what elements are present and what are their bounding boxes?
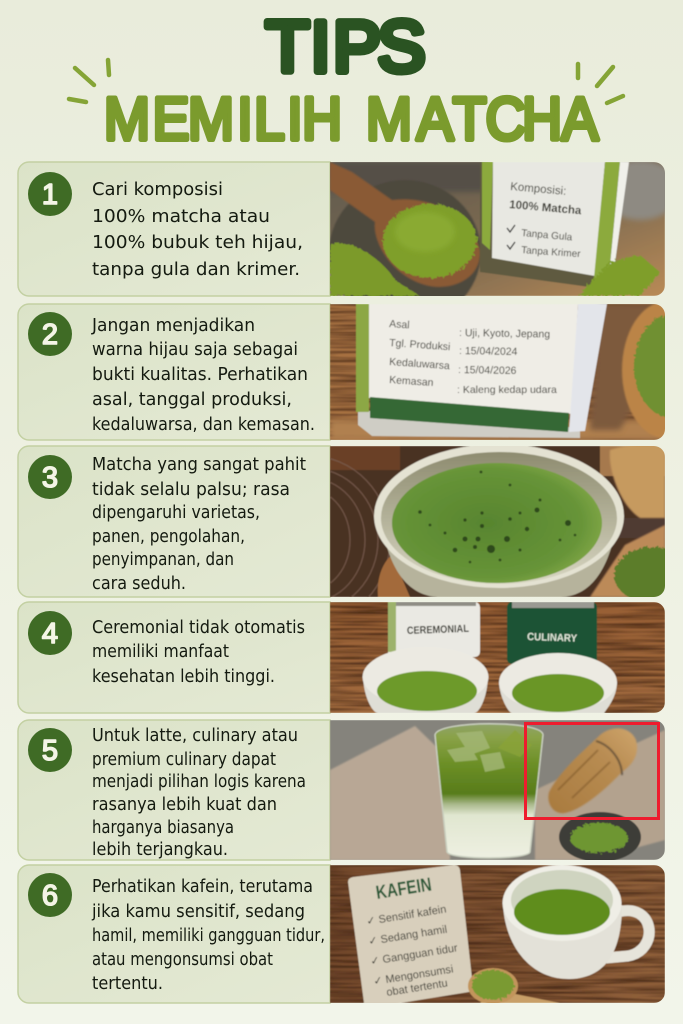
- panel 6 text card: hamil, memiliki gangguan tidur,: [92, 925, 325, 946]
- panel 1 photo: spoon of matcha and label: [330, 162, 665, 296]
- panel 2 text card: 2: [42, 319, 58, 351]
- panel 1 photo: spoon of matcha and label: Tanpa Krimer: [521, 245, 582, 260]
- panel 4 text card: [18, 602, 330, 713]
- white cup: [502, 865, 649, 979]
- panel 3 text card: penyimpanan, dan: [92, 549, 234, 570]
- panel 1 photo: spoon of matcha and label: Tanpa Gula: [521, 228, 573, 243]
- panel 2 text card: Jangan menjadikan: [91, 315, 255, 336]
- panel 3 text card: tidak selalu palsu; rasa: [92, 479, 290, 500]
- panel 5 text card: Untuk latte, culinary atau: [92, 725, 298, 746]
- panel 1 photo: spoon of matcha and label: 100% Matcha: [509, 199, 582, 217]
- panel 2: label details: [18, 302, 683, 440]
- panel 4 text card: Ceremonial tidak otomatis: [92, 617, 305, 638]
- panel 2 photo: product label: : 15/04/2026: [458, 364, 517, 377]
- decorative sparks around title: [69, 60, 623, 103]
- panel 2 text card: asal, tanggal produksi,: [92, 389, 292, 410]
- panel 4 text card: memiliki manfaat: [92, 641, 229, 662]
- caffeine note card: ✓ Mengonsumsi: [373, 963, 454, 988]
- panel 4 text card: 4: [42, 618, 58, 650]
- panel 2 text card: bukti kualitas. Perhatikan: [92, 364, 308, 385]
- title: TIPS: TIPS: [266, 8, 426, 88]
- panel 1 text card: [18, 162, 330, 296]
- panel 2 text card: warna hijau saja sebagai: [92, 339, 298, 360]
- panel 3 text card: panen, pengolahan,: [92, 526, 245, 547]
- panel 4: ceremonial vs culinary: [18, 602, 665, 713]
- panel 1: composition: [17, 161, 665, 297]
- panel 3 text card: Matcha yang sangat pahit: [92, 454, 306, 475]
- caffeine note card: ✓ Sedang hamil: [368, 924, 448, 948]
- panel 5 text card: lebih terjangkau.: [92, 839, 228, 860]
- panel 6 text card: tertentu.: [92, 973, 163, 994]
- caffeine note card: KAFEIN: [374, 874, 433, 904]
- panel 2 photo: product label: : Kaleng kedap udara: [457, 384, 557, 396]
- panel 6: caffeine: [18, 865, 665, 1008]
- panel 5 text card: [18, 720, 330, 860]
- panel 6 text card: Perhatikan kafein, terutama: [92, 876, 313, 897]
- panel 6 text card: [18, 865, 330, 1003]
- panel 6 text card: jika kamu sensitif, sedang: [91, 901, 305, 922]
- panel 2 text card: kedaluwarsa, dan kemasan.: [92, 414, 315, 435]
- panel 6 text card: 6: [42, 880, 58, 912]
- panel 2 text card: [18, 304, 330, 440]
- panel 2 photo: product label: : 15/04/2024: [459, 345, 518, 358]
- panel 5 photo: iced matcha latte and whisk: [330, 720, 665, 862]
- panel 1 text card: tanpa gula dan krimer.: [92, 259, 300, 280]
- panel 1 text card: Cari komposisi: [92, 179, 223, 200]
- panel 5 text card: 5: [42, 735, 58, 767]
- caffeine note card: ✓ Gangguan tidur: [370, 942, 459, 968]
- panel 1 text card: 100% bubuk teh hijau,: [92, 232, 303, 253]
- panel 2 photo: product label: Asal: [389, 318, 410, 331]
- panel 3 text card: cara seduh.: [92, 573, 186, 594]
- panel 2 photo: product label: [330, 302, 683, 440]
- panel 5 text card: menjadi pilihan logis karena: [92, 771, 306, 792]
- caffeine note card: [348, 865, 473, 1008]
- panel 3 text card: [18, 446, 330, 597]
- title: MEMILIH MATCHA: MEMILIH MATCHA: [104, 86, 599, 153]
- panel 2 photo: product label: : Uji, Kyoto, Jepang: [459, 327, 550, 341]
- caffeine note card: ✓ Sensitif kafein: [366, 903, 447, 928]
- panel 5 text card: harganya biasanya: [92, 817, 234, 838]
- panel 5 text card: rasanya lebih kuat dan: [92, 794, 277, 815]
- panel 6 photo: caffeine card and cup: [330, 865, 665, 1008]
- panel 1 text card: 100% matcha atau: [92, 206, 270, 227]
- latte glass: [435, 724, 543, 858]
- panel 6 text card: atau mengonsumsi obat: [92, 949, 273, 970]
- panel 4 photo: two bowls and tins: CULINARY: [527, 631, 577, 645]
- red highlight rectangle: [526, 724, 658, 818]
- bamboo whisk: [548, 728, 637, 813]
- panel 2 photo: product label: Kemasan: [389, 374, 434, 389]
- panel 1 photo: spoon of matcha and label: Komposisi:: [510, 181, 567, 198]
- panel 4 text card: kesehatan lebih tinggi.: [92, 666, 275, 687]
- panel 2 photo: product label: Tgl. Produksi: [389, 337, 451, 353]
- panel 2 photo: product label: Kedaluwarsa: [389, 356, 450, 372]
- panel 4 photo: two bowls and tins: CEREMONIAL: [407, 623, 470, 637]
- panel 5: latte: [18, 720, 665, 862]
- caffeine note card: obat tertentu: [386, 977, 448, 999]
- panel 3 photo: bowl of matcha: [330, 446, 665, 597]
- panel 4 photo: two bowls and tins: [330, 602, 665, 713]
- panel 3: taste: [17, 445, 665, 598]
- panel 3 text card: 3: [42, 462, 58, 494]
- panel 3 text card: dipengaruhi varietas,: [92, 502, 260, 523]
- panel 5 text card: premium culinary dapat: [92, 749, 276, 770]
- panel 1 text card: 1: [42, 179, 58, 211]
